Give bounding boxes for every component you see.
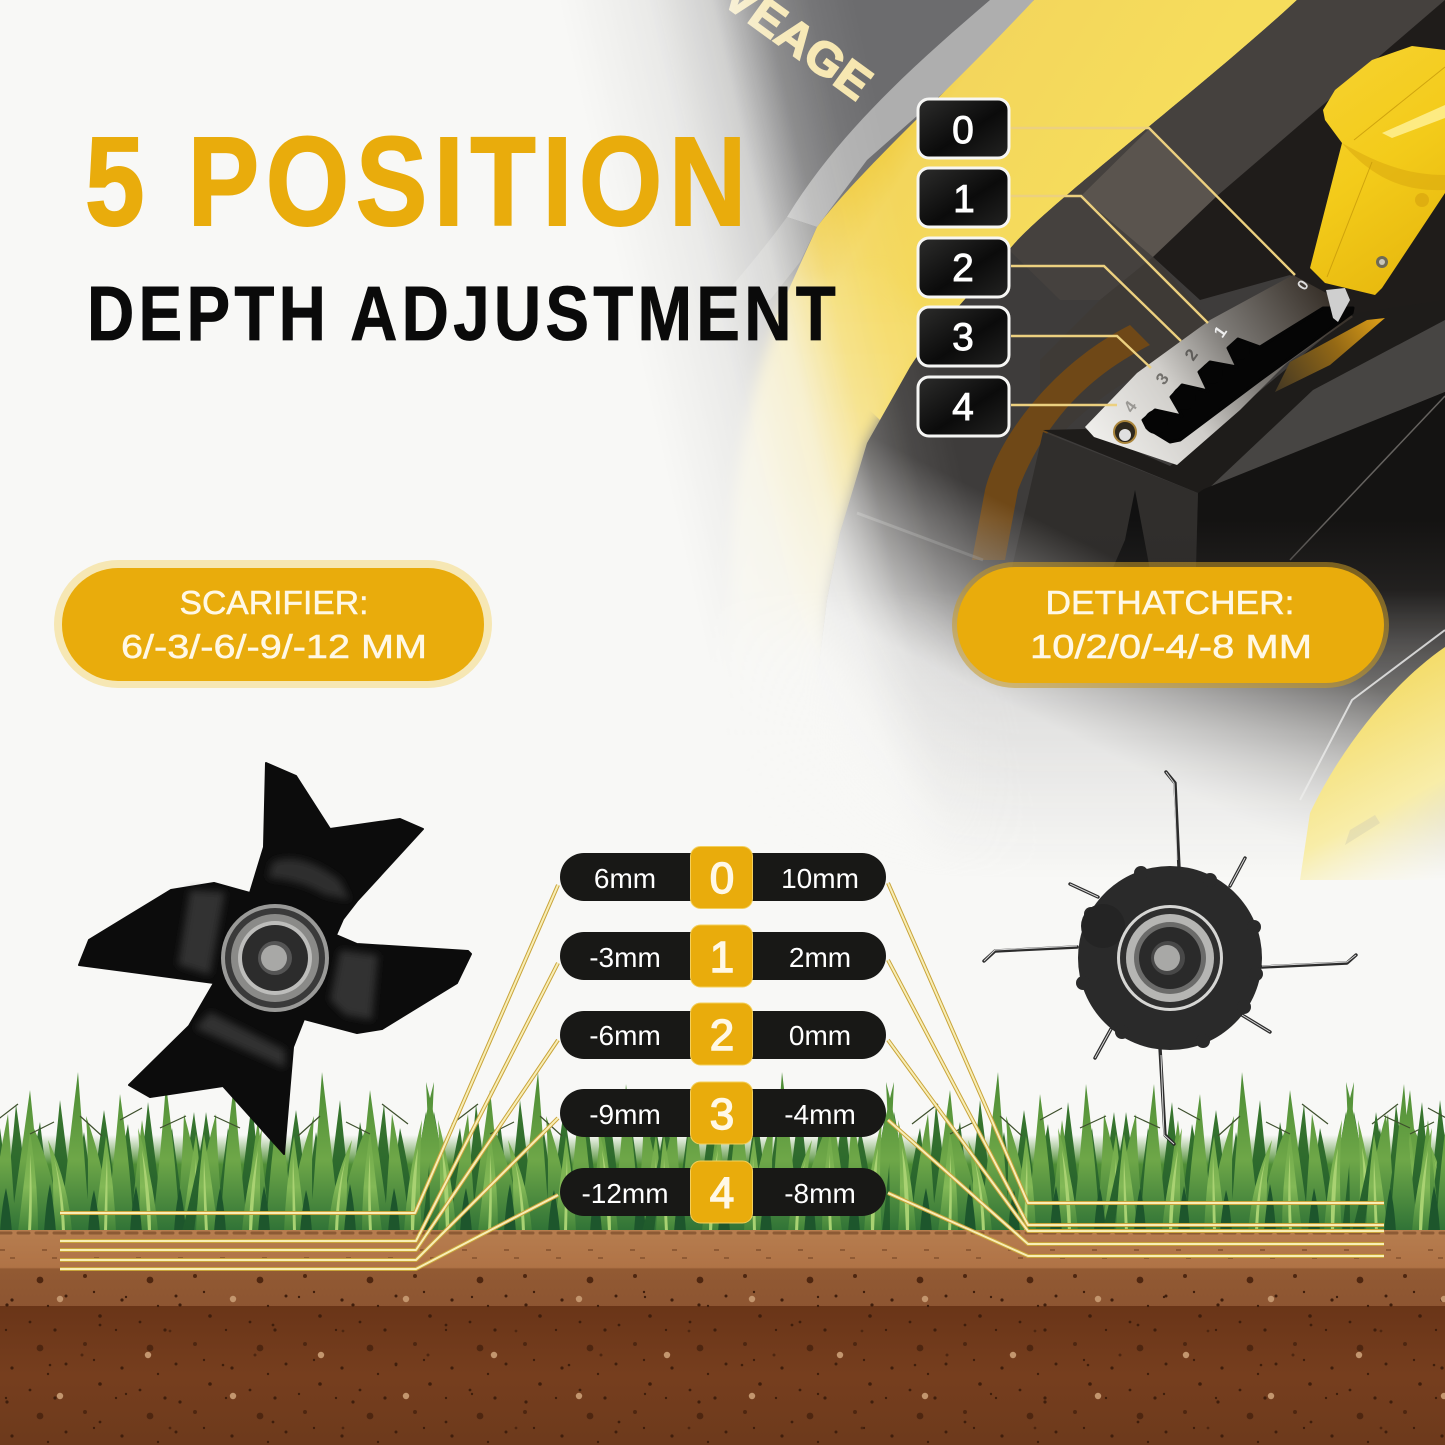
pill: dethatcher: DETHATCHER: <box>1046 584 1294 621</box>
connector lines: dethatcher depths <box>888 883 1384 1256</box>
row 4: -8mm <box>784 1178 856 1209</box>
position badges: 4 <box>952 386 974 429</box>
position badges: 0 <box>952 109 974 152</box>
dethatcher wheel <box>984 772 1356 1144</box>
machine photo: lawn scarifier body fading into background <box>610 0 1445 849</box>
pill: dethatcher: 10/2/0/-4/-8 MM <box>1030 628 1312 665</box>
pill: scarifier: SCARIFIER: <box>180 584 368 621</box>
row 4 <box>560 1161 886 1223</box>
machine detail: depth slot plate: 2 <box>1181 346 1202 364</box>
title: 5 POSITION <box>85 111 753 252</box>
position badges <box>918 99 1009 436</box>
position badges: 1 <box>953 178 975 221</box>
row 1: -3mm <box>589 942 661 973</box>
row 2 <box>560 1003 886 1065</box>
machine detail: depth slot plate: 1 <box>1210 323 1231 341</box>
connector lines: scarifier depths <box>60 885 558 1269</box>
position badges: 3 <box>952 316 974 359</box>
title <box>85 111 840 357</box>
machine detail: depth slot plate: 3 <box>1152 370 1173 388</box>
row 1 <box>560 925 886 987</box>
row 2: 2 <box>710 1011 734 1060</box>
row 0: 6mm <box>594 863 656 894</box>
connector lines: lever positions <box>1011 128 1295 405</box>
soil <box>0 1230 1445 1445</box>
row 0: 0 <box>710 854 734 903</box>
machine detail: lower right yellow wheel <box>1300 647 1445 880</box>
pill: dethatcher <box>952 562 1389 688</box>
row 0: 10mm <box>781 863 859 894</box>
pill: scarifier: 6/-3/-6/-9/-12 MM <box>121 628 427 665</box>
row 0 <box>560 846 886 908</box>
row 3: -4mm <box>784 1099 856 1130</box>
row 3: -9mm <box>589 1099 661 1130</box>
row 2: -6mm <box>589 1020 661 1051</box>
row 1: 1 <box>710 933 734 982</box>
machine detail: depth slot plate: 0 <box>1294 277 1313 294</box>
machine detail: depth slot plate: 4 <box>1120 397 1141 416</box>
pill: scarifier <box>54 560 492 688</box>
position badges: 2 <box>952 247 974 290</box>
tines <box>984 772 1356 1144</box>
row 1: 2mm <box>789 942 851 973</box>
row 4: 4 <box>710 1169 734 1218</box>
row 2: 0mm <box>789 1020 851 1051</box>
icon: yellow adjustment knob <box>1310 46 1445 322</box>
icon: wheel hub bearing <box>1117 905 1223 1011</box>
icon: blade hub bearing <box>221 904 329 1012</box>
disc <box>1076 866 1263 1050</box>
row 4: -12mm <box>581 1178 669 1209</box>
row 3: 3 <box>710 1090 734 1139</box>
title: DEPTH ADJUSTMENT <box>87 271 840 357</box>
row 3 <box>560 1082 886 1144</box>
depth table <box>560 846 886 1223</box>
grass <box>0 1072 1445 1233</box>
machine detail: depth slot plate <box>1085 275 1353 465</box>
scarifier blade <box>79 763 471 1154</box>
